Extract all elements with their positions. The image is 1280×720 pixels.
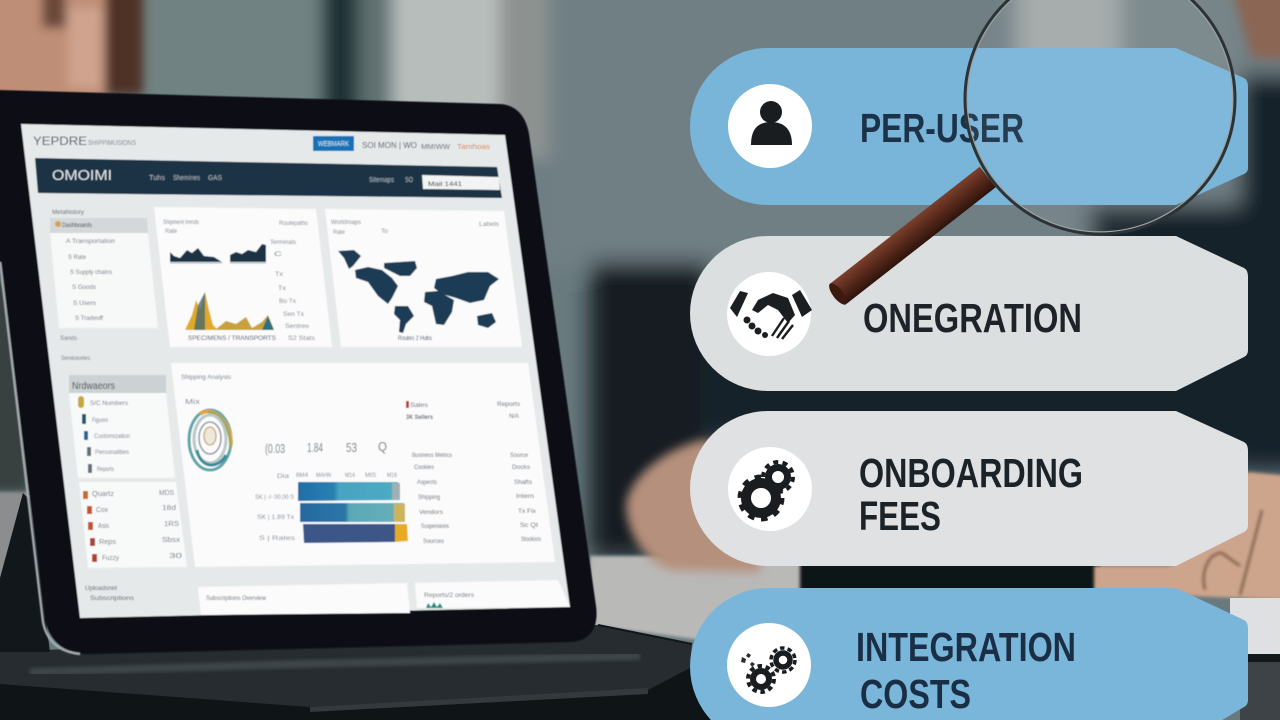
metric figures (265, 439, 387, 456)
line and area chart panel: S2 Stats (288, 336, 315, 342)
lower left table: Asis (98, 523, 109, 530)
right side table: Tx Fix (518, 508, 537, 515)
icon: gears (728, 447, 812, 531)
stacked bar chart: SK | -/- 00.00 S (255, 495, 294, 501)
lower left list: items (69, 393, 175, 478)
lower left list: items: Figures (92, 418, 108, 424)
line and area chart panel: Tx (278, 286, 286, 292)
world map panel: To (381, 229, 389, 235)
line and area chart panel: Routepaths (279, 221, 308, 227)
left wall colours (130, 0, 550, 160)
icon: handshake (727, 272, 812, 356)
right side table: Shipping (418, 494, 440, 501)
lower left list: items: Reports (97, 467, 114, 473)
main analytics panel: Mix (185, 399, 201, 406)
right side table: Cookies (414, 464, 435, 471)
right side table: Sources (423, 538, 445, 545)
sidebar menu: S Goods (72, 285, 96, 291)
right side table: 3K Sellers (406, 414, 433, 421)
stacked bar chart: M14 (345, 473, 356, 479)
keyboard base (0, 625, 692, 712)
bottom screen panels (85, 580, 570, 615)
sidebar menu: S Rate (68, 255, 87, 261)
right side table: Aspects (417, 479, 438, 486)
line and area chart panel: Bo Tx (279, 299, 296, 305)
lower left table: 18d (162, 505, 176, 512)
left dark wall below tablet edge (0, 280, 30, 492)
right side table: Sc Qt (520, 522, 538, 529)
right side table: Vendors (419, 509, 444, 516)
sidebar menu: Sands (60, 336, 77, 342)
bottom screen panels: Reports/2 orders (424, 592, 475, 599)
world map panel: Worldmaps (331, 220, 361, 226)
line and area chart panel (154, 207, 332, 347)
sidebar menu: S Users (73, 301, 96, 307)
icon: user (728, 84, 812, 168)
world map panel: Rate (333, 230, 346, 236)
nav bar: Shemines (173, 175, 200, 182)
right side table: N/A (509, 413, 520, 420)
logo row: Tamhoas (457, 144, 491, 151)
desk foreground (0, 660, 720, 720)
label: per-user: PER-USER (860, 105, 1024, 151)
stacked bar chart: 6M4 (296, 473, 309, 479)
lower left table (79, 482, 187, 568)
right side table: Intern (516, 493, 534, 500)
lower left table: Cox (96, 507, 108, 514)
lower left table: Sbsx (162, 537, 181, 544)
line and area chart panel: SPECIMENS / TRANSPORTS (188, 336, 276, 342)
lower left table: MDS (159, 490, 174, 497)
right side table: Sales (410, 402, 429, 409)
label: integration: INTEGRATION (856, 624, 1076, 670)
laptop (0, 90, 597, 654)
sidebar menu: Serviceories (61, 356, 90, 362)
nav bar (35, 158, 502, 198)
donut chart (189, 410, 231, 470)
logo row: YEPDRE (33, 134, 87, 148)
sidebar menu: Dashboards (62, 223, 92, 229)
bottom screen panels: Uploadsnet (85, 586, 117, 592)
metric figures: 1.84 (307, 440, 323, 455)
right side table: Stockists (521, 536, 542, 543)
table surface right (1230, 598, 1280, 720)
icon: integration gears (727, 623, 811, 707)
screen (21, 124, 570, 618)
label: fees: FEES (859, 493, 941, 539)
left hand blurred (626, 440, 760, 572)
right side table: Business Metrics (412, 452, 453, 459)
right side table: Suspensions (421, 523, 450, 530)
table behind tablet (590, 556, 810, 640)
sidebar menu: A Transportation (66, 239, 115, 245)
logo row: MMIWW (421, 144, 450, 151)
world map panel: Labels (479, 222, 499, 228)
lower left table: Reps (99, 539, 117, 546)
silver edge (0, 262, 80, 654)
line and area chart panel: Rate (165, 229, 178, 235)
label: onegration: ONEGRATION (863, 295, 1082, 341)
sidebar menu: S Tradeoff (75, 316, 103, 322)
nav bar: Mail 1441 (428, 182, 463, 188)
lower left table: Fuzzy (102, 555, 119, 562)
callout: onegration (690, 236, 1248, 391)
right hand (1094, 472, 1280, 600)
lower left table: Quartz (92, 491, 115, 498)
metric figures: 53 (346, 440, 357, 455)
nav bar: Sitemaps (369, 177, 394, 184)
main analytics panel: Shipping Analysis (181, 375, 231, 381)
logo row: SOI MON | WO (362, 141, 417, 150)
tablet stand (0, 493, 50, 652)
left table (0, 492, 30, 662)
blurred face top left (0, 0, 143, 100)
bezel (0, 90, 597, 654)
logo row: SHIPPIMUSIONS (88, 140, 136, 147)
right side table (406, 401, 542, 545)
stacked bar chart: MIS (365, 473, 376, 479)
world map panel (325, 209, 522, 347)
right side table: Reports (497, 401, 521, 408)
stacked bar chart: MAHN (316, 473, 331, 479)
bottom screen panels: Subscriptions Overview (206, 595, 266, 602)
label: onboarding: ONBOARDING (859, 450, 1083, 496)
blurred person top right (1232, 0, 1280, 60)
line and area chart panel: Tx (275, 272, 283, 278)
stacked bar chart: SK | 1.89 Tx (257, 515, 294, 521)
line and area chart panel: Sentres (285, 324, 309, 330)
stacked bar chart: M16 (387, 473, 398, 479)
logo row (33, 134, 491, 151)
icon: magnifying glass (826, 0, 1235, 307)
callout: onboarding fees (690, 411, 1248, 566)
metric figures: Q (378, 439, 387, 454)
sidebar menu (50, 210, 158, 362)
callout: integration costs (690, 588, 1248, 720)
lower left table: 1RS (164, 521, 179, 528)
line and area chart panel: C (274, 252, 283, 258)
lower left list: items: Customization (94, 434, 130, 440)
lower left list: items: Personalities (95, 450, 129, 456)
nav bar: OMOIMI (52, 167, 112, 184)
right side table: Source (510, 452, 528, 459)
sidebar menu: S Supply chains (70, 270, 112, 276)
stacked bar chart (255, 473, 408, 543)
logo row: WEBMARK (318, 141, 349, 148)
lower left table: 30 (169, 553, 182, 560)
right side table: Shafts (514, 479, 533, 486)
line and area chart panel: Sen Tx (283, 312, 304, 318)
lower left list: header (69, 375, 166, 393)
label: costs: COSTS (860, 671, 971, 717)
stacked bar chart: Dia (277, 474, 290, 480)
nav bar: GAS (208, 175, 222, 182)
sidebar menu: Metahistory (52, 210, 84, 216)
stacked bar chart: S | Rates (259, 536, 295, 542)
line and area chart panel: Terminals (270, 240, 296, 246)
lower left list: header: Nrdwaeors (72, 381, 115, 392)
bottom screen panels: Subscriptions (90, 596, 134, 602)
dark desk between pills (800, 560, 1100, 592)
main analytics panel (171, 363, 555, 567)
metric figures: (0.03 (265, 441, 285, 456)
line and area chart panel: Shipment trends (163, 220, 199, 226)
nav bar: Tuhs (149, 175, 166, 182)
nav bar: SO (405, 177, 413, 184)
lower left list: items: S/C Numbers (90, 401, 128, 407)
right side table: Docks (512, 464, 531, 471)
world map panel: Routes 2 Hubs (398, 336, 432, 342)
callout: per-user (690, 48, 1248, 205)
